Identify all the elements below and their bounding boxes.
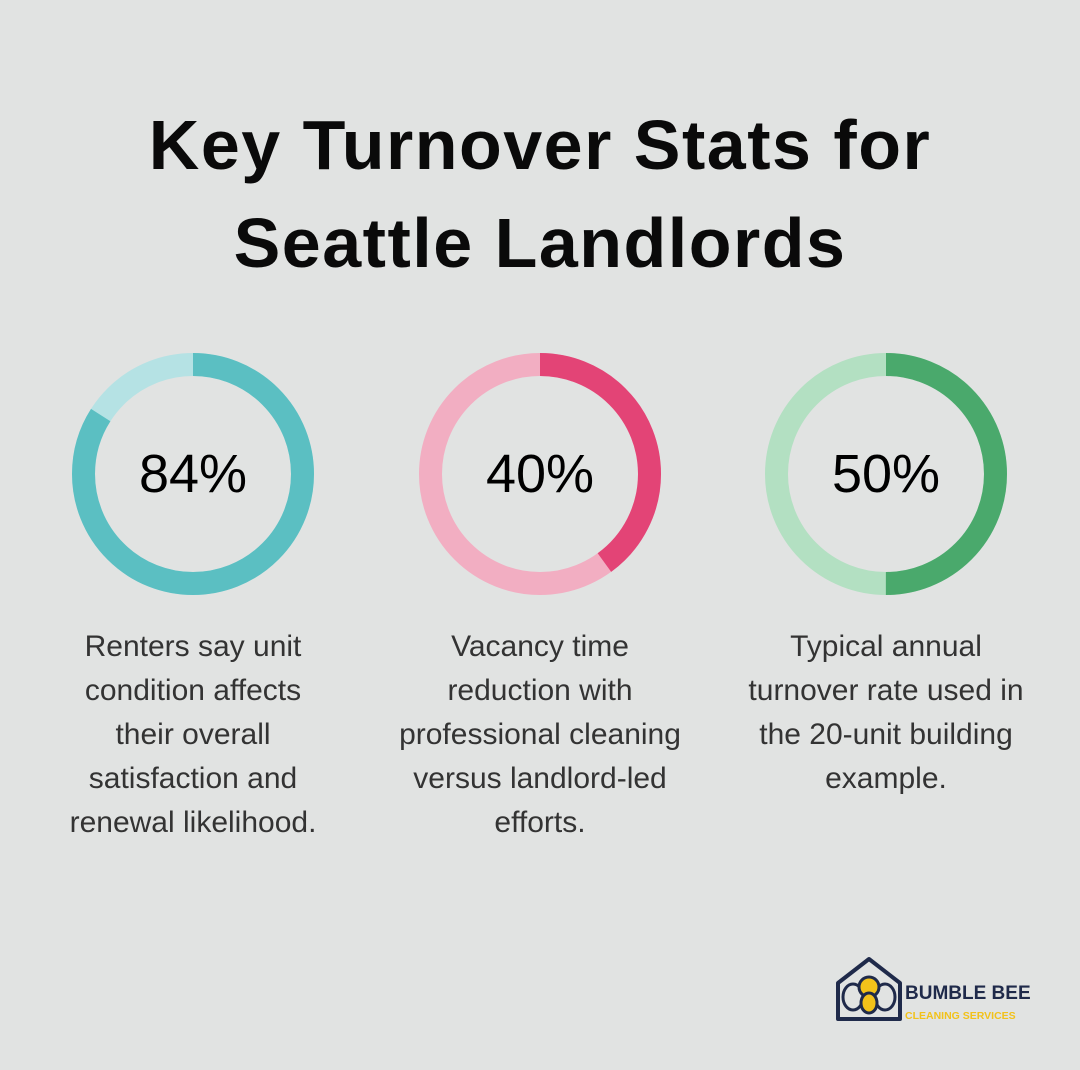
text: 84% description: renewal likelihood. bbox=[70, 806, 316, 839]
donut: 84%: 84% bbox=[139, 444, 247, 504]
text: 40% description: professional cleaning bbox=[399, 718, 681, 751]
text: 40% description: reduction with bbox=[447, 674, 633, 707]
text: 84% description: satisfaction and bbox=[89, 762, 297, 795]
text: 50% description: turnover rate used in bbox=[748, 674, 1024, 707]
text: 84% description: condition affects bbox=[85, 674, 301, 707]
text: 40% description bbox=[399, 630, 681, 839]
text: 40% description: versus landlord-led bbox=[413, 762, 667, 795]
donut: 50% bbox=[765, 353, 1007, 595]
text: 50% description: the 20-unit building bbox=[759, 718, 1013, 751]
text: 84% description: Renters say unit bbox=[85, 630, 301, 663]
logo text bbox=[905, 983, 1031, 1022]
text: 40% description: Vacancy time bbox=[451, 630, 629, 663]
logo text: CLEANING SERVICES bbox=[905, 1010, 1016, 1022]
text: 84% description bbox=[70, 630, 316, 839]
donut: 50%: 50% bbox=[832, 444, 940, 504]
title bbox=[149, 106, 931, 282]
text: 50% description bbox=[748, 630, 1024, 795]
logo bbox=[836, 957, 1031, 1022]
donut: 84% bbox=[72, 353, 314, 595]
donut: 40%: 40% bbox=[486, 444, 594, 504]
title: Key Turnover Stats for bbox=[149, 106, 931, 184]
logo text: BUMBLE BEE bbox=[905, 983, 1031, 1004]
text: 40% description: efforts. bbox=[494, 806, 586, 839]
icon: bee house bbox=[836, 957, 902, 1021]
text: 50% description: Typical annual bbox=[790, 630, 982, 663]
title: Seattle Landlords bbox=[234, 204, 846, 282]
donut: 40% bbox=[419, 353, 661, 595]
text: 84% description: their overall bbox=[115, 718, 271, 751]
text: 50% description: example. bbox=[825, 762, 947, 795]
